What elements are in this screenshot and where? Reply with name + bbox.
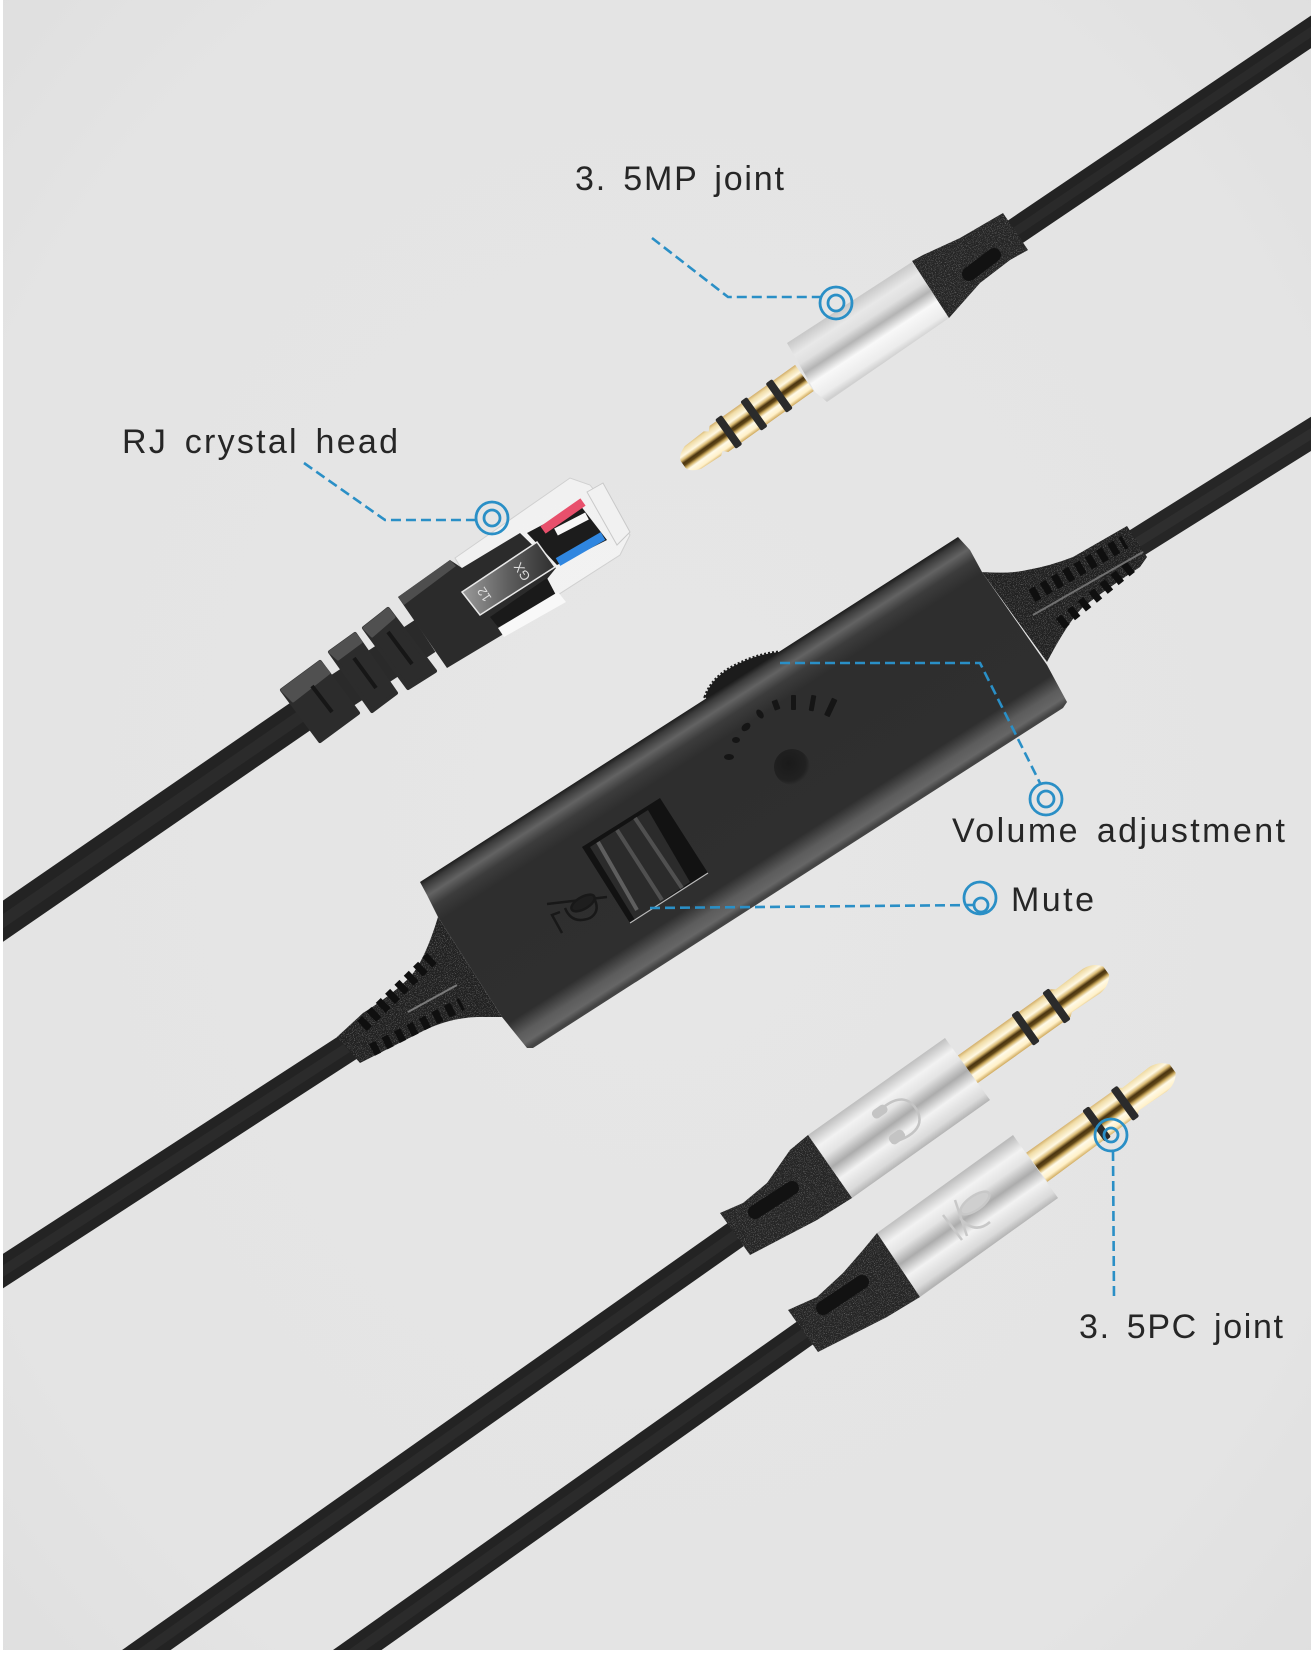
front cap: [587, 483, 630, 545]
centre ridge: [1033, 552, 1143, 615]
cable: upper right to 3.5 mm plug: [1015, 19, 1315, 232]
callout: 3.5MP joint: [652, 238, 852, 319]
control module body: [420, 537, 1067, 1048]
cable: module right side: [1135, 422, 1315, 544]
ribs: [362, 958, 432, 1026]
tab marking GX: GX: [510, 559, 533, 584]
dark recess below tab: [490, 578, 557, 627]
cable boot ribs: [282, 609, 435, 741]
label: volume adjustment: Volume adjustment: [952, 812, 1286, 850]
internal contact area: [527, 505, 607, 565]
white wire: [556, 516, 587, 532]
callout: RJ crystal head: [304, 463, 508, 534]
icon: microphone: [943, 1188, 993, 1240]
strain relief: [788, 1233, 920, 1352]
icon: headset: [872, 1099, 920, 1144]
icon: muted microphone: [547, 891, 607, 933]
microphone 3.5 mm plug: [788, 1053, 1184, 1352]
3.5 mm 4-pole plug: [673, 213, 1028, 479]
volume hole: [774, 749, 810, 785]
clear plastic body: [455, 478, 630, 632]
cable: headphone plug: [118, 1228, 745, 1653]
bottom clear strip: [498, 592, 566, 637]
marker ring: [1030, 783, 1062, 815]
marker ring: [820, 287, 852, 319]
leader line: [304, 463, 476, 520]
cable: module left side: [0, 1046, 350, 1286]
cable: microphone plug: [329, 1328, 812, 1653]
leader line: [1113, 1151, 1114, 1298]
module left strain relief: [337, 917, 502, 1063]
volume level marks: [724, 695, 838, 760]
marker ring: [476, 502, 508, 534]
callout: 3.5PC joint: [1095, 1119, 1127, 1298]
relief slot: [755, 1188, 792, 1212]
headphone 3.5 mm plug: [720, 955, 1117, 1255]
relief slot: [823, 1282, 862, 1308]
cable: RJ connector: [0, 714, 304, 937]
label: 3.5MP joint: 3. 5MP joint: [575, 160, 785, 198]
label: mute: Mute: [1011, 881, 1094, 919]
callout: volume adjustment: [780, 663, 1062, 815]
callout: mute: [650, 882, 996, 914]
red wire: [543, 502, 583, 530]
clear locking tab: [462, 542, 555, 615]
tab marking 12: 12: [474, 584, 494, 605]
leader line: [652, 238, 821, 297]
relief slot: [969, 255, 994, 274]
blue wire: [558, 536, 603, 562]
leader line: [650, 905, 976, 908]
gold tip: [673, 363, 815, 479]
module right strain relief: [982, 526, 1147, 662]
label: 3.5PC joint: 3. 5PC joint: [1079, 1308, 1284, 1346]
silver barrel: [808, 1038, 990, 1198]
ribs: [1032, 542, 1125, 596]
volume wheel: [705, 652, 790, 708]
silver barrel: [787, 262, 949, 402]
marker ring: [964, 882, 996, 914]
strain relief: [720, 1135, 852, 1255]
centre ridge: [408, 985, 457, 1012]
leader line: [780, 663, 1040, 783]
gold tip: [1026, 1053, 1184, 1183]
switch ridges: [598, 818, 682, 910]
black head: [398, 533, 556, 668]
mute switch: [582, 798, 708, 923]
marker ring: [1095, 1119, 1127, 1151]
strain relief: [912, 213, 1028, 318]
gold tip: [957, 955, 1117, 1085]
label: RJ crystal head: RJ crystal head: [122, 423, 398, 461]
RJ crystal head connector: [282, 478, 630, 741]
silver barrel: [877, 1135, 1058, 1297]
